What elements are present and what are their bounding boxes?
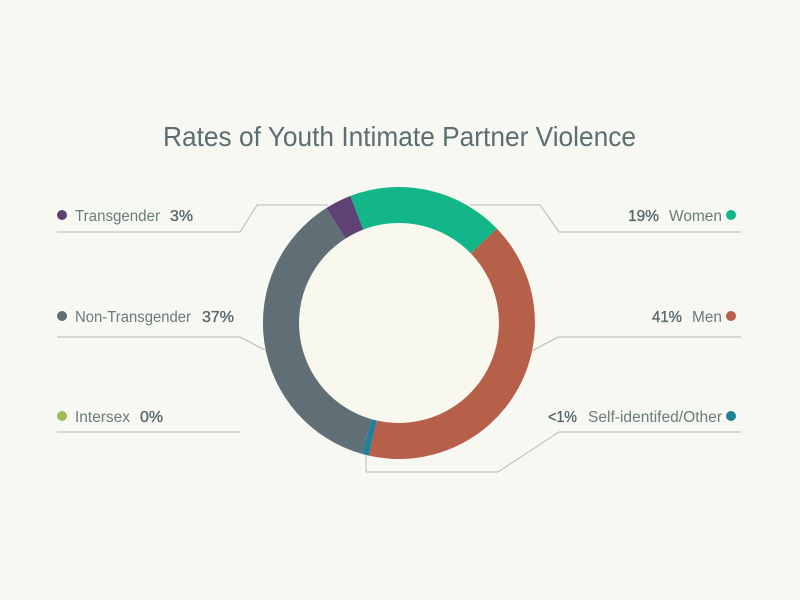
legend: intersex: 0% <box>140 409 163 426</box>
legend: non-transgender <box>57 309 265 350</box>
legend: men: 41% <box>652 309 682 326</box>
legend: transgender: Transgender <box>75 208 160 225</box>
segment: non-transgender 37% <box>263 208 372 454</box>
legend: men <box>532 309 741 351</box>
donut chart <box>263 187 535 459</box>
legend: self-identified/other: <1% <box>548 409 577 426</box>
legend: transgender <box>57 205 328 232</box>
legend: intersex: Intersex <box>75 409 130 426</box>
legend: intersex <box>57 409 240 432</box>
legend: women: 19% <box>628 208 659 225</box>
segment: women 19% <box>350 187 497 254</box>
legend: self-identified/other: Self-identifed/Other <box>588 409 722 426</box>
legend: women: Women <box>669 208 722 225</box>
title: Rates of Youth Intimate Partner Violence <box>163 121 636 152</box>
legend: self-identified/other <box>366 409 741 472</box>
legend: women <box>470 205 741 232</box>
legend: transgender: 3% <box>170 208 193 225</box>
segment: men 41% <box>369 228 535 459</box>
legend: men: Men <box>692 309 722 326</box>
segment: transgender 3% <box>326 196 363 238</box>
legend: non-transgender: 37% <box>202 309 234 326</box>
segment: self-identified/other <1% <box>362 419 377 456</box>
legend: non-transgender: Non-Transgender <box>75 309 191 326</box>
